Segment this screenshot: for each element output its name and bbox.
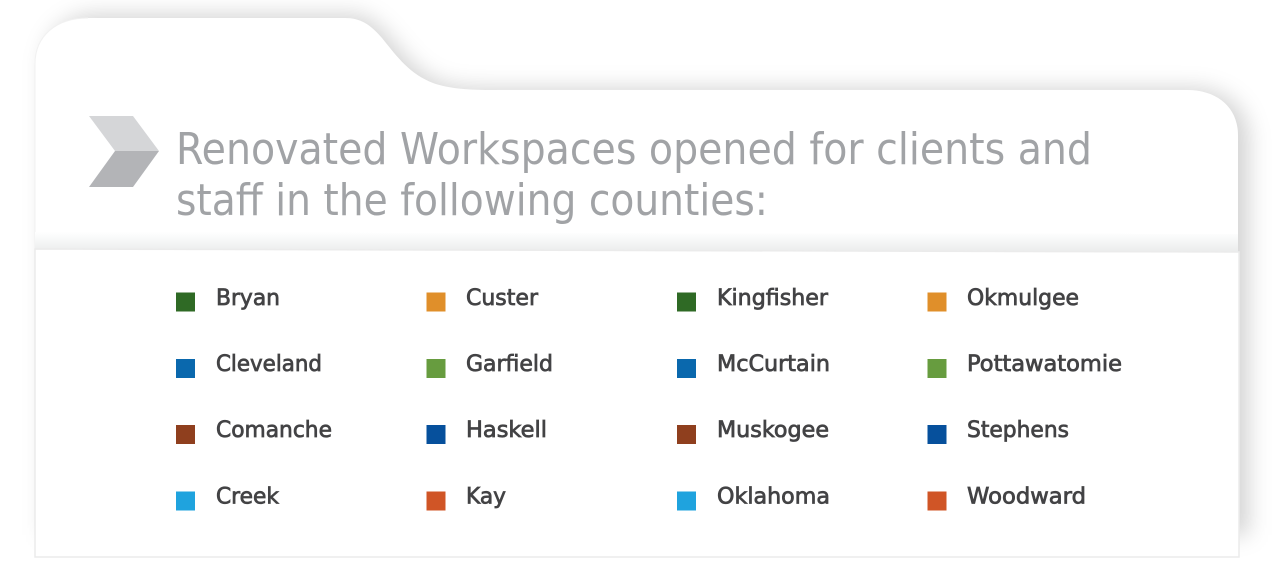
county: Haskell: Haskell: [466, 418, 547, 443]
folder top tab: [35, 18, 1238, 252]
county list: [176, 286, 1122, 510]
county: McCurtain: McCurtain: [717, 352, 830, 377]
panel body: [35, 249, 1239, 557]
county: Oklahoma: Oklahoma: [717, 484, 830, 510]
county: Creek: Creek: [216, 484, 279, 510]
county: Custer: [426, 286, 539, 312]
county: Creek: [176, 484, 279, 510]
heading: staff in the following counties:: [176, 176, 768, 226]
county: Haskell: [426, 418, 547, 444]
county: Garfield: [426, 352, 553, 378]
county: Okmulgee: Okmulgee: [967, 286, 1079, 311]
county: Comanche: Comanche: [216, 418, 332, 443]
heading: Renovated Workspaces opened for clients and: [176, 125, 1092, 175]
county: Cleveland: Cleveland: [216, 352, 322, 377]
county: Woodward: Woodward: [967, 484, 1086, 510]
county: Muskogee: Muskogee: [717, 418, 829, 443]
fold shading: [35, 232, 1238, 252]
county: Bryan: Bryan: [216, 286, 280, 311]
left edge line: [35, 18, 88, 250]
county: Garfield: Garfield: [466, 352, 553, 377]
county: Kay: [426, 484, 506, 510]
county: Stephens: [928, 418, 1069, 444]
county: Custer: Custer: [466, 286, 539, 311]
county: Bryan: [176, 286, 280, 312]
county: Pottawatomie: Pottawatomie: [967, 352, 1122, 377]
icon: chevron: [89, 116, 159, 187]
county: Cleveland: [176, 352, 322, 378]
county: Stephens: Stephens: [967, 418, 1069, 443]
county: Kay: Kay: [466, 484, 506, 510]
county: Kingfisher: Kingfisher: [717, 286, 829, 311]
